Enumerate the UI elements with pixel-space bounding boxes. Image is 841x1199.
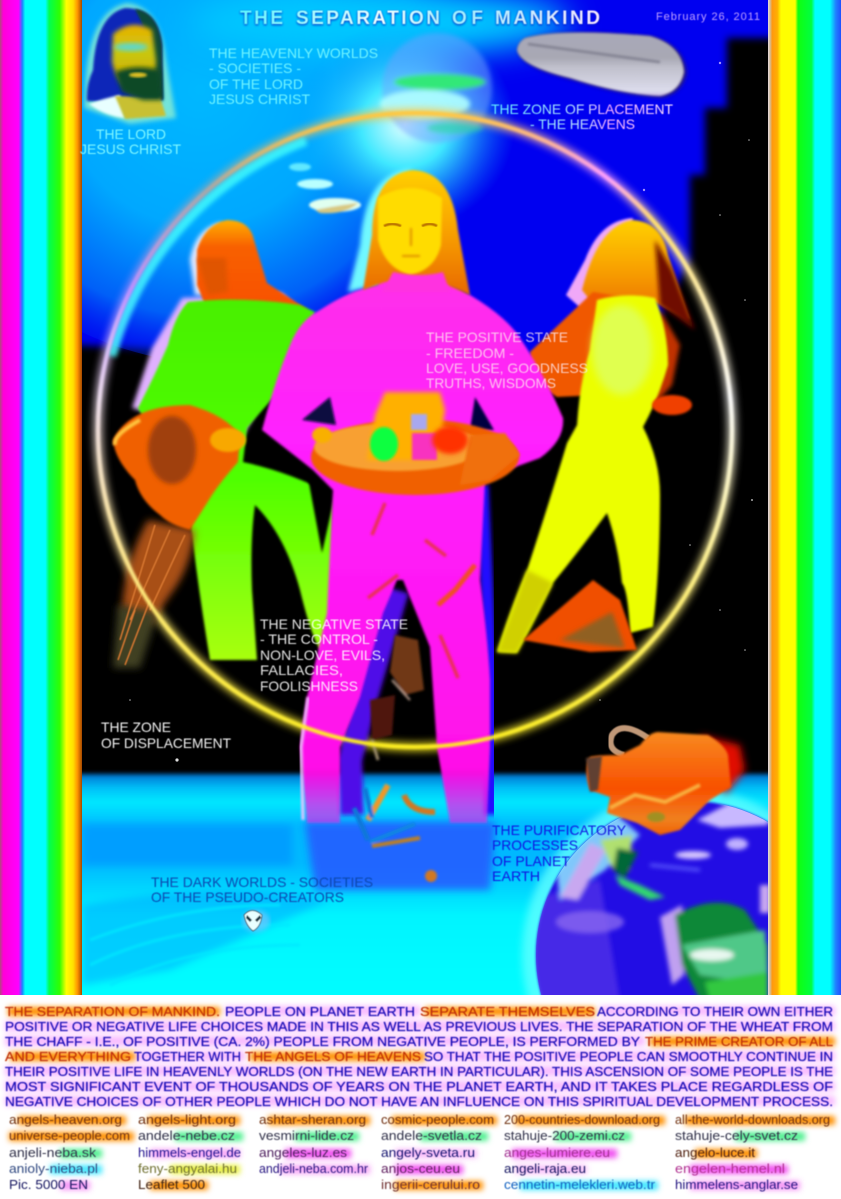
falling souls — [354, 785, 437, 882]
website links: himmels-engel.de — [138, 1146, 241, 1160]
ring outer glow — [98, 113, 732, 747]
right figure yellow — [497, 218, 695, 653]
ship large — [309, 198, 361, 212]
label: zone of displacement: THE ZONE — [101, 719, 171, 735]
right lilac edge — [760, 885, 770, 913]
website links: anjos-ceu.eu — [381, 1162, 460, 1176]
green figure — [370, 427, 398, 461]
jug olive spot — [647, 812, 665, 822]
website links: himmelens-anglar.se — [675, 1178, 798, 1192]
website links: universe-people.com — [9, 1129, 130, 1143]
cloud streak two — [726, 838, 748, 850]
centre hair halo — [348, 168, 413, 292]
line five: THEIR POSITIVE LIFE IN HEAVENLY WORLDS (ON THE NEW EARTH IN PARTICULAR). THIS ASCENSION OF SOME PEOPLE IS THE — [5, 1065, 833, 1079]
right side blue rim — [482, 485, 491, 815]
line one: THE SEPARATION OF MANKIND. — [5, 1005, 220, 1019]
right face shadow — [655, 240, 695, 330]
left torso and legs — [138, 300, 334, 660]
magenta body — [262, 272, 563, 823]
blue sky — [70, 0, 780, 375]
hair back — [363, 170, 470, 295]
cloud streak — [675, 851, 711, 859]
label: dark worlds: THE DARK WORLDS - SOCIETIES — [151, 874, 373, 890]
website links — [9, 1113, 830, 1192]
website links: ingerii-cerului.ro — [381, 1178, 480, 1192]
hair — [87, 8, 163, 104]
lower falling figure — [370, 695, 395, 740]
website links: angeli-raja.eu — [504, 1162, 586, 1176]
Jesus portrait — [84, 3, 176, 124]
darker water streaks — [82, 825, 330, 985]
alien head — [242, 910, 270, 932]
title shadow: MANKIND — [495, 9, 600, 30]
right hair halo — [566, 218, 633, 312]
glow around heavenly globe — [319, 43, 512, 214]
lowest limb — [372, 740, 378, 760]
tray hand left — [312, 427, 332, 443]
jug handle — [610, 728, 648, 755]
hand — [210, 428, 246, 452]
globe bright lower — [380, 90, 470, 118]
stars — [129, 62, 753, 762]
title text: SEPARATION — [296, 8, 440, 29]
title shadow: OF — [452, 9, 483, 30]
right hair — [582, 220, 690, 320]
lips — [129, 72, 147, 78]
label: zone of placement: - THE HEAVENS — [530, 116, 635, 132]
title text: THE — [240, 8, 283, 29]
paragraph lines: ACCORDING TO THEIR OWN EITHER — [597, 1005, 833, 1019]
label: purificatory processes: PROCESSES — [492, 837, 578, 853]
dark green coast — [613, 848, 638, 878]
ship medium — [297, 179, 333, 189]
capsule spaceship — [517, 32, 686, 97]
label: the lord jesus christ: JESUS CHRIST — [80, 141, 181, 157]
title band glow — [190, 0, 570, 56]
line four: AND EVERYTHING — [5, 1050, 131, 1064]
website links: feny-angyalai.hu — [138, 1162, 237, 1176]
earth atmosphere — [522, 789, 841, 1121]
label: heavenly worlds: - SOCIETIES - — [209, 60, 301, 76]
left figure halo — [132, 293, 305, 438]
label: positive state: THE POSITIVE STATE — [426, 329, 568, 345]
black gap beside hip — [308, 478, 336, 553]
title text: MANKIND — [495, 8, 600, 29]
face — [112, 25, 156, 94]
right shoulder shadow — [650, 310, 680, 410]
right hand — [652, 395, 692, 415]
andes lilac edge — [660, 905, 684, 985]
title shadow: THE — [240, 9, 283, 30]
label: heavenly worlds: THE HEAVENLY WORLDS — [209, 45, 378, 61]
pink tower — [412, 433, 437, 460]
paragraph lines: SEPARATE THEMSELVES — [420, 1005, 595, 1019]
jug lower pattern — [610, 785, 700, 808]
bundle at feet — [523, 580, 637, 652]
website links: angeles-luz.es — [259, 1146, 347, 1160]
hair right dark side — [135, 9, 163, 100]
website links: 200-countries-download.org — [504, 1113, 660, 1127]
left figure green — [132, 220, 336, 660]
water ripples — [90, 905, 300, 985]
website links: angels-light.org — [138, 1113, 236, 1127]
south america cloud — [690, 949, 734, 961]
ship large shade — [315, 203, 358, 213]
label: the lord jesus christ: THE LORD — [96, 126, 166, 142]
website link glows — [9, 1116, 835, 1190]
left ocean lighter — [530, 880, 620, 1000]
title text: OF — [452, 8, 483, 29]
website links: andele-svetla.cz — [381, 1129, 482, 1143]
small spaceships — [289, 163, 361, 213]
centre figure — [262, 168, 563, 823]
website links: stahuje-200-zemi.cz — [504, 1129, 625, 1143]
label: heavenly worlds — [209, 45, 378, 107]
line three: THE CHAFF - I.E., OF POSITIVE (CA. 2%) PEOPLE FROM NEGATIVE PEOPLE, IS PERFORMED BY — [5, 1035, 641, 1049]
rear boot — [497, 570, 553, 653]
globe upper half — [382, 33, 492, 143]
capsule body — [517, 32, 684, 96]
yellow building — [367, 392, 445, 460]
website links: all-the-world-downloads.org — [675, 1113, 830, 1127]
streak one — [82, 825, 292, 865]
capsule dark outline — [519, 33, 686, 97]
website links: Leaflet 500 — [138, 1178, 205, 1192]
right rainbow stripe — [767, 0, 841, 995]
soul four — [425, 870, 437, 882]
planet earth — [522, 789, 841, 1121]
small figures between legs — [370, 635, 424, 760]
left rainbow stripe — [0, 0, 84, 995]
earth sphere — [536, 801, 841, 1109]
pants tears — [368, 503, 475, 678]
website links: cennetin-melekleri.web.tr — [504, 1178, 655, 1192]
date: February 26, 2011 — [656, 11, 760, 23]
soul one blue — [354, 788, 372, 840]
hair bundle — [113, 405, 246, 668]
bundle texture — [148, 416, 196, 484]
illustration panel — [82, 0, 768, 995]
globe lower land — [427, 122, 483, 134]
blue window — [411, 414, 427, 430]
hair strands — [118, 525, 185, 665]
jug body — [586, 732, 731, 835]
water jug — [586, 728, 745, 835]
website links: andele-nebe.cz — [138, 1129, 235, 1143]
central america strip — [615, 875, 665, 900]
yellow-green gulf — [600, 835, 632, 870]
ring left half — [98, 113, 415, 747]
trailing hair — [122, 520, 195, 625]
website links: anioly-nieba.pl — [9, 1162, 98, 1176]
label: negative state: FALLACIES, — [260, 662, 343, 678]
label: positive state: TRUTHS, WISDOMS — [426, 375, 556, 391]
paragraph lines: THE ANGELS OF HEAVENS — [245, 1050, 421, 1064]
label: purificatory processes: EARTH — [492, 868, 540, 884]
bundle rim — [115, 420, 140, 445]
website links: cosmic-people.com — [381, 1113, 494, 1127]
soul one — [368, 785, 388, 820]
website links: anjeli-neba.sk — [9, 1146, 97, 1160]
title text — [240, 8, 600, 29]
label: dark worlds: OF THE PSEUDO-CREATORS — [151, 889, 344, 905]
title shadow: SEPARATION — [296, 9, 440, 30]
website links: engelen-hemel.nl — [675, 1162, 785, 1176]
lilac coast strip — [560, 843, 606, 900]
label: negative state: FOOLISHNESS — [260, 678, 358, 694]
label: heavenly worlds: OF THE LORD — [209, 76, 303, 92]
line seven: NEGATIVE CHOICES OF OTHER PEOPLE WHICH DO NOT HAVE AN INFLUENCE ON THIS SPIRITUAL DEVELOPMENT PROCESS. — [5, 1095, 833, 1109]
upper falling figure limb — [392, 680, 410, 700]
label: heavenly worlds: JESUS CHRIST — [209, 91, 310, 107]
red object — [432, 426, 468, 454]
title shadow — [240, 9, 600, 30]
distant globe — [380, 33, 492, 143]
website links: anges-lumiere.eu — [504, 1146, 610, 1160]
south america — [675, 903, 768, 1000]
label: positive state: LOVE, USE, GOODNESS — [426, 360, 588, 376]
label: negative state: THE NEGATIVE STATE — [260, 616, 408, 632]
shoulders — [89, 95, 125, 118]
alien face — [244, 910, 262, 931]
right torso and legs — [497, 295, 668, 653]
website links: angely-sveta.ru — [381, 1146, 475, 1160]
nose and mouth — [402, 228, 420, 256]
left arm gap — [302, 397, 336, 425]
paragraph lines — [5, 1005, 833, 1109]
line two: POSITIVE OR NEGATIVE LIFE CHOICES MADE IN THIS AS WELL AS PREVIOUS LIVES. THE SEPARATION OF THE WHEAT FROM — [5, 1020, 833, 1034]
website links: angelo-luce.it — [675, 1146, 756, 1160]
portrait halo — [84, 3, 176, 124]
paragraph orange highlights — [8, 1007, 835, 1061]
glow left half — [98, 113, 415, 747]
water — [70, 774, 780, 1009]
paragraph glow — [5, 1006, 835, 1106]
label: positive state: - FREEDOM - — [426, 345, 514, 361]
pale leg rim — [301, 697, 308, 820]
right cape — [530, 292, 640, 397]
label: zone of displacement — [101, 719, 231, 751]
label: positive state — [426, 329, 588, 391]
label: zone of placement: THE ZONE OF PLACEMENT — [491, 101, 673, 117]
right torso upper tint — [592, 305, 652, 395]
label: the lord jesus christ — [80, 126, 181, 157]
label: purificatory processes — [492, 822, 627, 884]
paragraph lines: PEOPLE ON PLANET EARTH — [225, 1005, 415, 1019]
trailing hair end — [113, 605, 158, 668]
ocean cloud patch — [556, 911, 624, 933]
alien eyes — [246, 915, 261, 922]
tray hand right — [460, 433, 520, 485]
space background — [82, 0, 768, 800]
glow right half — [415, 113, 732, 747]
paragraph lines: SO THAT THE POSITIVE PEOPLE CAN SMOOTHLY CONTINUE IN — [424, 1050, 833, 1064]
label: zone of displacement: OF DISPLACEMENT — [101, 735, 231, 751]
right arm gap — [470, 397, 494, 430]
website links: vesmirni-lide.cz — [259, 1129, 354, 1143]
north clouds — [697, 800, 768, 828]
blue island streak — [650, 865, 700, 870]
alien halo — [242, 910, 270, 932]
website links: angels-heaven.org — [9, 1113, 122, 1127]
label: dark worlds — [151, 874, 373, 905]
bundle body — [113, 405, 240, 530]
left hair — [197, 220, 308, 310]
label: negative state: - THE CONTROL - — [260, 631, 378, 647]
jug mouth shade — [586, 756, 602, 792]
yellow glow — [170, 1165, 240, 1174]
eye band — [114, 43, 148, 51]
line six: MOST SIGNIFICANT EVENT OF THOUSANDS OF YEARS ON THE PLANET EARTH, AND IT TAKES PLACE REGARDLESS OF — [5, 1080, 833, 1094]
south america pale lower — [682, 930, 768, 985]
cyan inner rim — [112, 141, 306, 356]
capsule seam — [528, 44, 660, 62]
streak two — [82, 891, 330, 985]
paragraph lines: THE PRIME CREATOR OF ALL — [645, 1035, 833, 1049]
chest — [115, 96, 166, 119]
label: purificatory processes: THE PURIFICATORY — [492, 822, 627, 838]
website links: stahuje-cely-svet.cz — [675, 1129, 798, 1143]
south america tip — [705, 972, 768, 1000]
label: zone of placement — [491, 101, 673, 132]
paragraph text block — [5, 1005, 835, 1109]
ring main line — [98, 113, 732, 747]
tray — [311, 419, 519, 495]
label: purificatory processes: OF PLANET — [492, 853, 570, 869]
tray top — [314, 423, 482, 471]
soul three — [372, 838, 420, 846]
ship small — [289, 163, 311, 171]
globe green land — [394, 74, 486, 90]
website links: ashtar-sheran.org — [259, 1113, 366, 1127]
beard — [115, 67, 162, 100]
label: negative state: NON-LOVE, EVILS, — [260, 647, 385, 663]
left face — [197, 258, 228, 295]
collar — [382, 272, 450, 292]
jug red shadow — [700, 735, 745, 795]
bundle inner shade — [560, 612, 625, 648]
left head halo — [190, 222, 222, 295]
paragraph lines: TOGETHER WITH — [134, 1050, 241, 1064]
label: negative state — [260, 616, 408, 694]
upper falling figure — [390, 635, 424, 695]
upper atmosphere pale — [555, 800, 640, 900]
soul three blue — [370, 824, 415, 842]
brows and eyes — [384, 224, 437, 226]
cyan sky glow — [82, 0, 453, 356]
website links: Pic. 5000 EN — [9, 1178, 88, 1192]
ring right half — [415, 113, 732, 747]
face — [378, 188, 442, 275]
soul two — [404, 795, 435, 812]
website links: andjeli-neba.com.hr — [259, 1162, 368, 1176]
left leg inner purple rim — [350, 590, 397, 815]
leg reflection — [305, 822, 495, 890]
